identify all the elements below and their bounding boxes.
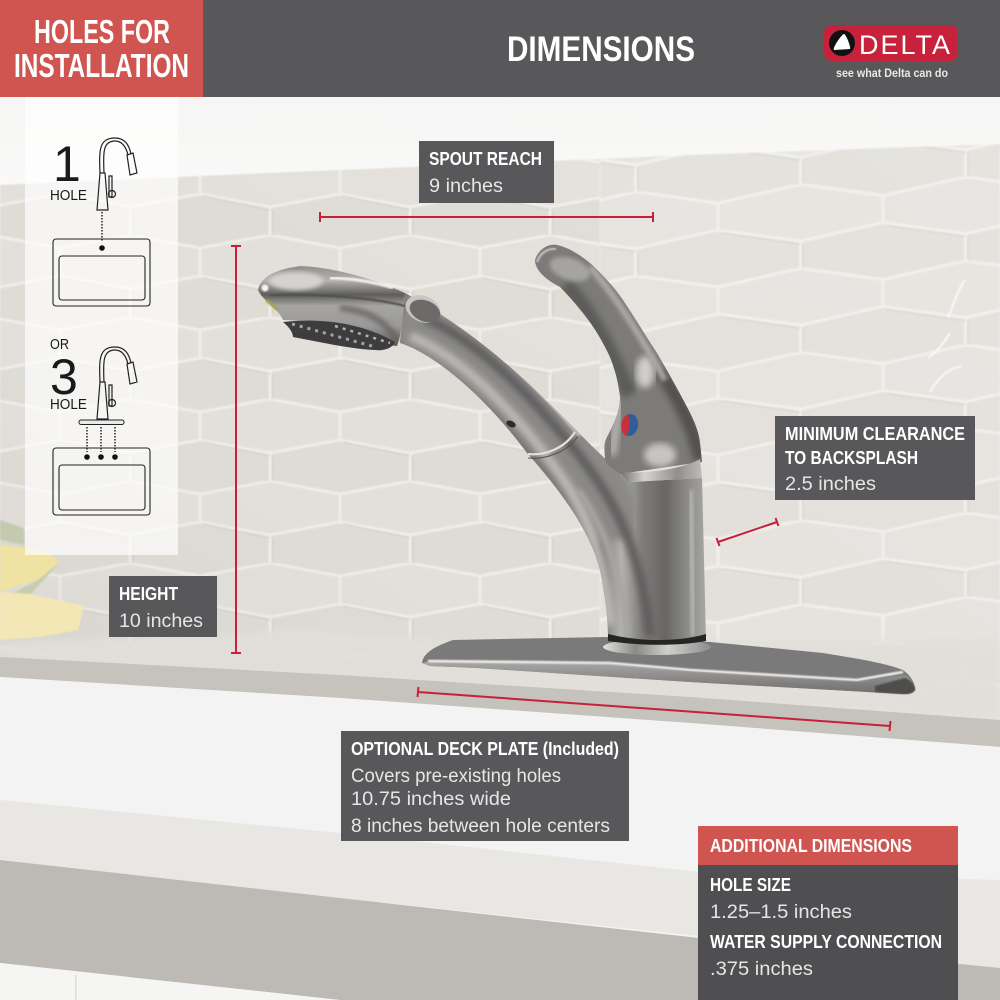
panel: additional dimensions: WATER SUPPLY CONNECTION (710, 932, 942, 952)
three hole group: HOLE (50, 397, 87, 413)
three hole group: OR (50, 337, 69, 353)
backsplash shading (0, 144, 1000, 725)
dotted connector (101, 212, 103, 242)
three hole group: 3 (50, 349, 78, 405)
dimension: deck plate line (418, 687, 890, 731)
callout: height: 10 inches (119, 611, 203, 632)
faucet (258, 245, 915, 694)
tiled backsplash, left part (0, 159, 600, 700)
callout: minimum clearance: MINIMUM CLEARANCE (785, 424, 965, 444)
panel: additional dimensions: .375 inches (710, 959, 813, 980)
spray button (401, 290, 445, 328)
callout: optional deck plate: 8 inches between hole centers (351, 816, 610, 837)
logo: Delta (824, 25, 958, 80)
callout: optional deck plate: 10.75 inches wide (351, 789, 511, 810)
flowers (0, 520, 84, 640)
heading: holes for installation: INSTALLATION (14, 47, 189, 84)
panel heading (698, 826, 958, 865)
neck ring (528, 432, 575, 454)
callout: spout reach: 9 inches (429, 176, 503, 197)
tiled backsplash, right part (600, 144, 1000, 725)
panel: additional dimensions: ADDITIONAL DIMENSIONS (710, 836, 912, 856)
handle (535, 245, 702, 474)
glass tile glints (928, 280, 965, 392)
header bar (203, 0, 1000, 97)
dimension: height line (231, 246, 241, 653)
panel: additional dimensions: HOLE SIZE (710, 875, 791, 895)
spout neck and base (400, 293, 706, 645)
one hole group (50, 136, 150, 306)
lower countertop surface (0, 800, 1000, 968)
callout: minimum clearance: TO BACKSPLASH (785, 448, 918, 468)
chrome ring (603, 639, 711, 655)
heading: dimensions: DIMENSIONS (507, 30, 695, 69)
three hole group (50, 337, 150, 515)
icon: sink (53, 239, 150, 306)
dotted connectors (87, 427, 115, 452)
callout: spout reach: SPOUT REACH (429, 149, 542, 169)
callout: height: HEIGHT (119, 584, 178, 604)
hot/cold indicator (621, 413, 639, 437)
one hole group: HOLE (50, 188, 87, 204)
icon: sink (53, 448, 150, 515)
deck plate (422, 637, 915, 694)
heading: holes for installation (0, 0, 203, 97)
logo: Delta: DELTA (859, 30, 950, 60)
icon: deck plate (79, 420, 124, 424)
gasket (608, 634, 706, 645)
callout: spout reach (419, 141, 554, 203)
icon: one-hole faucet (97, 138, 137, 210)
icon: three-hole faucet (97, 347, 137, 419)
sprayer face (283, 321, 395, 350)
panel: additional dimensions (698, 826, 958, 1000)
heading: holes for installation: HOLES FOR (34, 13, 170, 50)
callout: optional deck plate: Covers pre-existing holes (351, 766, 561, 787)
panel: additional dimensions: 1.25–1.5 inches (710, 902, 852, 923)
one hole group: 1 (53, 136, 81, 192)
spray head (258, 266, 445, 350)
callout: height (109, 576, 217, 637)
callout: minimum clearance (775, 416, 975, 500)
logo: Delta: see what Delta can do (836, 66, 948, 80)
cabinet below counter (0, 677, 1000, 900)
upper countertop front edge (0, 657, 1000, 747)
installation panel (25, 97, 178, 555)
callout: optional deck plate (341, 731, 629, 841)
upper countertop surface (0, 630, 1000, 722)
collar (620, 459, 702, 482)
dimension: spout reach line (320, 212, 653, 222)
callout: minimum clearance: 2.5 inches (785, 474, 876, 495)
lower countertop front edge (0, 860, 1000, 1000)
callout: optional deck plate: OPTIONAL DECK PLATE (Included) (351, 739, 619, 759)
dimension: clearance line (716, 518, 778, 546)
handle cup (547, 252, 593, 286)
